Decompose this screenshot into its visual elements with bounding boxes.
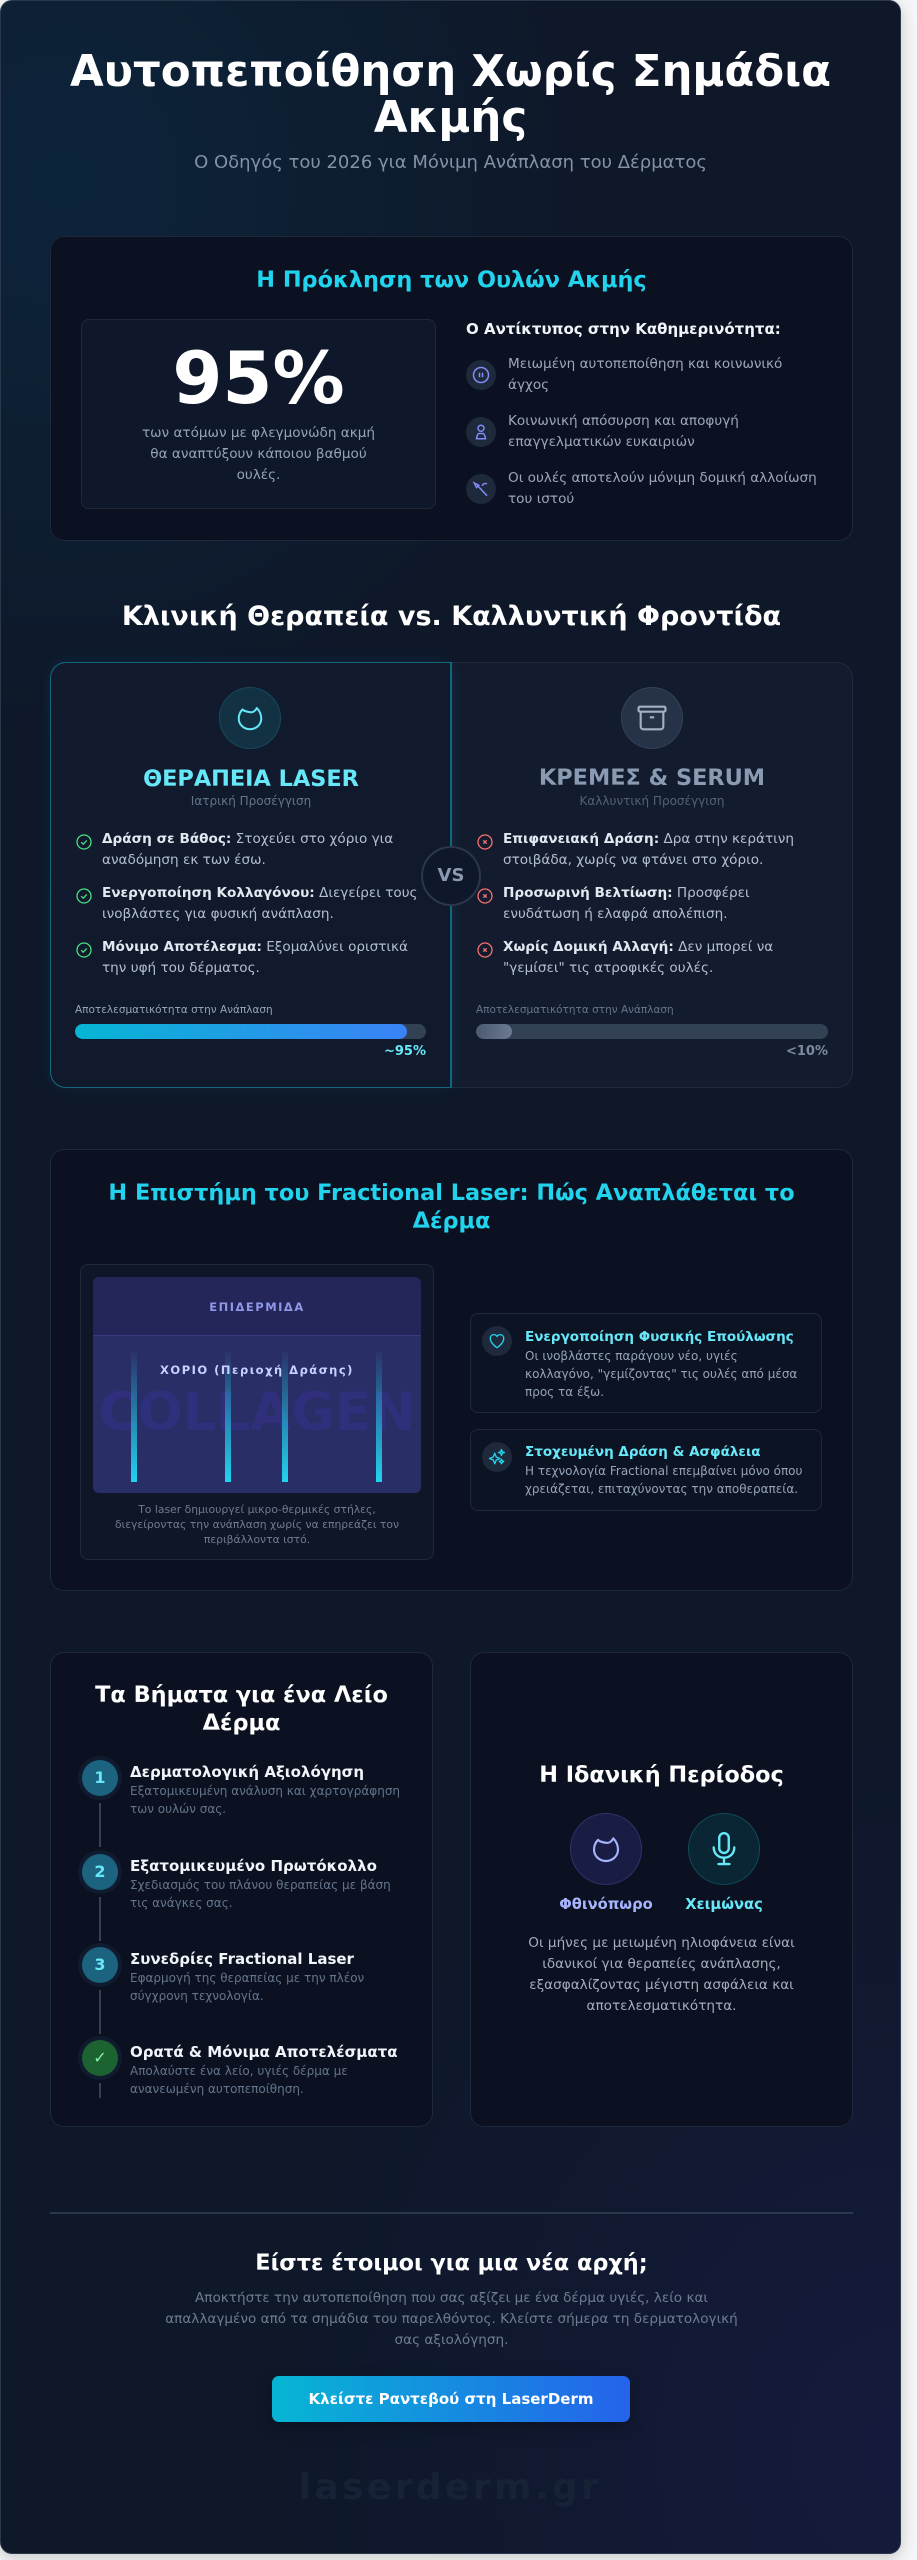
diagram caption: περιβάλλοντα ιστό. bbox=[204, 1533, 310, 1546]
diagram caption: διεγείροντας την ανάπλαση χωρίς να επηρεάζει τον bbox=[115, 1518, 399, 1531]
step number: 1 bbox=[94, 1768, 106, 1787]
effectiveness bar: under 10% bbox=[476, 1024, 828, 1039]
step text: Εξατομικευμένη ανάλυση και χαρτογράφηση bbox=[130, 1784, 400, 1798]
impact text: του ιστού bbox=[508, 491, 574, 507]
vs badge bbox=[421, 846, 481, 906]
stat caption: των ατόμων με φλεγμονώδη ακμή bbox=[142, 425, 375, 441]
item text: στοιβάδα, χωρίς να φτάνει στο χόριο. bbox=[503, 852, 763, 868]
item text: Επιφανειακή Δράση: Δρα στην κεράτινη bbox=[503, 831, 794, 847]
card text: Η τεχνολογία Fractional επεμβαίνει μόνο όπου bbox=[525, 1464, 802, 1478]
cta heading: Είστε έτοιμοι για μια νέα αρχή; bbox=[255, 2250, 648, 2276]
panel: cosmetic creams bbox=[451, 662, 853, 1088]
bar value: <10% bbox=[786, 1044, 828, 1059]
heading: clinical vs cosmetic: Κλινική Θεραπεία vs. Καλλυντική Φροντίδα bbox=[122, 601, 781, 632]
step number: 3 bbox=[94, 1955, 106, 1974]
impact text bbox=[508, 413, 739, 450]
step title: Ορατά & Μόνιμα Αποτελέσματα bbox=[130, 2043, 398, 2061]
list item: temporary improvement bbox=[477, 885, 750, 922]
panel: ideal season bbox=[470, 1652, 853, 2127]
heading: steps bbox=[95, 1682, 388, 1736]
heading: ideal period: Η Ιδανική Περίοδος bbox=[539, 1762, 784, 1788]
item text: Χωρίς Δομική Αλλαγή: Δεν μπορεί να bbox=[503, 939, 773, 955]
icon: person bbox=[466, 417, 496, 447]
season: autumn bbox=[547, 1813, 665, 1916]
list item: deep action bbox=[76, 831, 393, 868]
cosmetic title: ΚΡΕΜΕΣ & SERUM bbox=[539, 765, 765, 791]
item text bbox=[503, 831, 794, 868]
icon: tool bbox=[466, 474, 496, 504]
laser column 2 bbox=[225, 1352, 231, 1482]
impact text bbox=[508, 470, 817, 507]
step number bbox=[82, 1760, 118, 1796]
step 4 bbox=[78, 2036, 398, 2098]
list item: collagen activation bbox=[76, 885, 418, 922]
item text: ενυδάτωση ή ελαφρά απολέπιση. bbox=[503, 906, 728, 922]
impact text: επαγγελματικών ευκαιριών bbox=[508, 434, 695, 450]
step text bbox=[130, 1878, 391, 1910]
step 1 bbox=[78, 1756, 400, 1847]
step text bbox=[130, 2064, 348, 2096]
step check badge bbox=[82, 2040, 118, 2076]
step text bbox=[130, 1784, 400, 1816]
item text: Μόνιμο Αποτέλεσμα: Εξομαλύνει οριστικά bbox=[102, 939, 408, 955]
season: winter bbox=[665, 1813, 783, 1916]
laser column 3 bbox=[282, 1352, 288, 1482]
card title: Στοχευμένη Δράση & Ασφάλεια bbox=[525, 1444, 760, 1460]
autumn label: Φθινόπωρο bbox=[559, 1896, 653, 1913]
panel: challenge of acne scars bbox=[50, 236, 853, 541]
epidermis layer bbox=[93, 1277, 421, 1336]
skin diagram box bbox=[80, 1264, 434, 1560]
step text: Απολαύστε ένα λείο, υγιές δέρμα με bbox=[130, 2064, 348, 2078]
icon: autumn flame bbox=[570, 1813, 642, 1885]
item text: Ενεργοποίηση Κολλαγόνου: Διεγείρει τους bbox=[102, 885, 418, 901]
diagram caption: Το laser δημιουργεί μικρο-θερμικές στήλες, bbox=[138, 1503, 376, 1516]
panel: steps bbox=[50, 1652, 433, 2127]
impact item: scars bbox=[466, 470, 817, 507]
icon: heart bbox=[482, 1326, 512, 1356]
dermis label: ΧΟΡΙΟ (Περιοχή Δράσης) bbox=[160, 1363, 354, 1377]
step 2 bbox=[78, 1850, 391, 1941]
bar label: Αποτελεσματικότητα στην Ανάπλαση bbox=[476, 1004, 674, 1016]
card text: χρειάζεται, επιταχύνοντας την αποθεραπεία. bbox=[525, 1482, 798, 1496]
card text: προς τα έξω. bbox=[525, 1385, 604, 1399]
icon: cross bbox=[477, 834, 493, 850]
laser subtitle: Ιατρική Προσέγγιση bbox=[191, 794, 311, 808]
step number bbox=[82, 1854, 118, 1890]
card text: Οι ινοβλάστες παράγουν νέο, υγιές bbox=[525, 1349, 738, 1363]
info card: targeted action bbox=[470, 1429, 822, 1511]
title: Αυτοπεποίθηση Χωρίς Σημάδια bbox=[70, 47, 831, 97]
item text: "γεμίσει" τις ατροφικές ουλές. bbox=[503, 960, 713, 976]
card title: Ενεργοποίηση Φυσικής Επούλωσης bbox=[525, 1329, 794, 1345]
icon: sparkles bbox=[482, 1442, 512, 1472]
stat number: 95% bbox=[172, 336, 345, 420]
season text bbox=[470, 1933, 853, 2017]
laser title: ΘΕΡΑΠΕΙΑ LASER bbox=[143, 766, 359, 792]
step text: Εφαρμογή της θεραπείας με την πλέον bbox=[130, 1971, 364, 1985]
heading: steps: Δέρμα bbox=[203, 1710, 280, 1736]
item text: την υφή του δέρματος. bbox=[102, 960, 260, 976]
card text: κολλαγόνο, "γεμίζοντας" τις ουλές από μέσα bbox=[525, 1367, 797, 1381]
step title: Εξατομικευμένο Πρωτόκολλο bbox=[130, 1857, 377, 1875]
cta button bbox=[272, 2376, 630, 2422]
icon: cross bbox=[477, 942, 493, 958]
step 3 bbox=[78, 1943, 364, 2034]
winter label: Χειμώνας bbox=[685, 1896, 763, 1913]
season text: αποτελεσματικότητα. bbox=[586, 1998, 736, 2014]
bar label: Αποτελεσματικότητα στην Ανάπλαση bbox=[75, 1004, 273, 1016]
season text: ιδανικοί για θεραπείες ανάπλασης, bbox=[542, 1956, 781, 1972]
footer call to action bbox=[50, 2212, 853, 2426]
step text: τις ανάγκες σας. bbox=[130, 1896, 233, 1910]
connector bbox=[99, 1897, 101, 1941]
impact text: Κοινωνική απόσυρση και αποφυγή bbox=[508, 413, 739, 429]
icon: microphone bbox=[688, 1813, 760, 1885]
impact text bbox=[508, 356, 782, 393]
item text: Προσωρινή Βελτίωση: Προσφέρει bbox=[503, 885, 750, 901]
watermark: laserderm.gr: laserderm.gr bbox=[299, 2467, 602, 2508]
list item: no structural change bbox=[477, 939, 773, 976]
impact text: άγχος bbox=[508, 377, 549, 393]
bar value: ~95% bbox=[384, 1044, 426, 1059]
subtitle: Ο Οδηγός του 2026 για Μόνιμη Ανάπλαση του Δέρματος bbox=[194, 152, 707, 173]
stat box: 95% bbox=[81, 319, 436, 509]
impact text: Μειωμένη αυτοπεποίθηση και κοινωνικό bbox=[508, 356, 782, 372]
step text: Σχεδιασμός του πλάνου θεραπείας με βάση bbox=[130, 1878, 391, 1892]
stat caption: ουλές. bbox=[237, 467, 280, 483]
heading: steps: Τα Βήματα για ένα Λείο bbox=[95, 1682, 388, 1708]
impact item: confidence bbox=[466, 356, 782, 393]
season text: Οι μήνες με μειωμένη ηλιοφάνεια είναι bbox=[528, 1935, 795, 1951]
step title: Δερματολογική Αξιολόγηση bbox=[130, 1763, 364, 1781]
step text bbox=[130, 1971, 364, 2003]
laser column 4 bbox=[376, 1352, 382, 1482]
item text bbox=[102, 939, 408, 976]
heading: science bbox=[108, 1180, 795, 1234]
effectiveness bar: 95% bbox=[75, 1024, 426, 1039]
stat caption: θα αναπτύξουν κάποιου βαθμού bbox=[150, 446, 367, 462]
item text bbox=[102, 831, 393, 868]
stat caption bbox=[142, 425, 375, 483]
heading: science: Δέρμα bbox=[413, 1208, 490, 1234]
connector bbox=[99, 2083, 101, 2098]
season text: εξασφαλίζοντας μέγιστη ασφάλεια και bbox=[529, 1977, 794, 1993]
list item: surface action bbox=[477, 831, 794, 868]
list item: permanent result bbox=[76, 939, 408, 976]
heading: daily impact: Ο Αντίκτυπος στην Καθημερινότητα: bbox=[466, 320, 781, 338]
heading: science: Η Επιστήμη του Fractional Laser: Πώς Αναπλάθεται το bbox=[108, 1180, 795, 1206]
step text: των ουλών σας. bbox=[130, 1802, 226, 1816]
step title: Συνεδρίες Fractional Laser bbox=[130, 1950, 354, 1968]
item text: Δράση σε Βάθος: Στοχεύει στο χόριο για bbox=[102, 831, 393, 847]
icon: check bbox=[76, 834, 92, 850]
step number: 2 bbox=[94, 1862, 106, 1881]
card text bbox=[525, 1464, 802, 1496]
icon: flame bbox=[219, 687, 281, 749]
vs badge: VS bbox=[438, 865, 464, 886]
cta button: Κλείστε Ραντεβού στη LaserDerm bbox=[309, 2390, 593, 2408]
icon: archive box bbox=[621, 687, 683, 749]
step check badge: ✓ bbox=[93, 2048, 107, 2067]
cta text: σας αξιολόγηση. bbox=[395, 2332, 508, 2348]
item text: αναδόμηση εκ των έσω. bbox=[102, 852, 266, 868]
collagen watermark: COLLAGEN bbox=[99, 1382, 415, 1443]
icon: pause circle bbox=[466, 360, 496, 390]
impact text: Οι ουλές αποτελούν μόνιμη δομική αλλοίωση bbox=[508, 470, 817, 486]
card text bbox=[525, 1349, 797, 1399]
panel: laser therapy bbox=[50, 662, 452, 1088]
icon: cross bbox=[477, 888, 493, 904]
impact item: withdrawal bbox=[466, 413, 739, 450]
step text: ανανεωμένη αυτοπεποίθηση. bbox=[130, 2082, 304, 2096]
comparison bbox=[50, 662, 853, 1088]
heading: challenge: Η Πρόκληση των Ουλών Ακμής bbox=[256, 267, 647, 293]
cta text: απαλλαγμένο από τα σημάδια του παρελθόντος. Κλείστε σήμερα τη δερματολογική bbox=[165, 2311, 738, 2327]
cta text: Αποκτήστε την αυτοπεποίθηση που σας αξίζει με ένα δέρμα υγιές, λείο και bbox=[195, 2290, 708, 2306]
connector bbox=[99, 1990, 101, 2034]
item text bbox=[503, 939, 773, 976]
panel: fractional laser science bbox=[50, 1149, 853, 1591]
epidermis label: ΕΠΙΔΕΡΜΙΔΑ bbox=[209, 1300, 305, 1314]
laser column 1 bbox=[131, 1352, 137, 1482]
cta text bbox=[50, 2288, 853, 2351]
cosmetic subtitle: Καλλυντική Προσέγγιση bbox=[580, 794, 724, 808]
icon: check bbox=[76, 888, 92, 904]
diagram caption bbox=[115, 1503, 399, 1546]
item text bbox=[503, 885, 750, 922]
connector bbox=[99, 1803, 101, 1847]
title: Ακμής bbox=[374, 93, 527, 143]
item text: ινοβλάστες για φυσική ανάπλαση. bbox=[102, 906, 334, 922]
info card: natural healing bbox=[470, 1313, 822, 1413]
item text bbox=[102, 885, 418, 922]
icon: check bbox=[76, 942, 92, 958]
step text: σύγχρονη τεχνολογία. bbox=[130, 1989, 264, 2003]
step number bbox=[82, 1947, 118, 1983]
skin layers diagram bbox=[93, 1277, 421, 1493]
title bbox=[70, 47, 831, 143]
